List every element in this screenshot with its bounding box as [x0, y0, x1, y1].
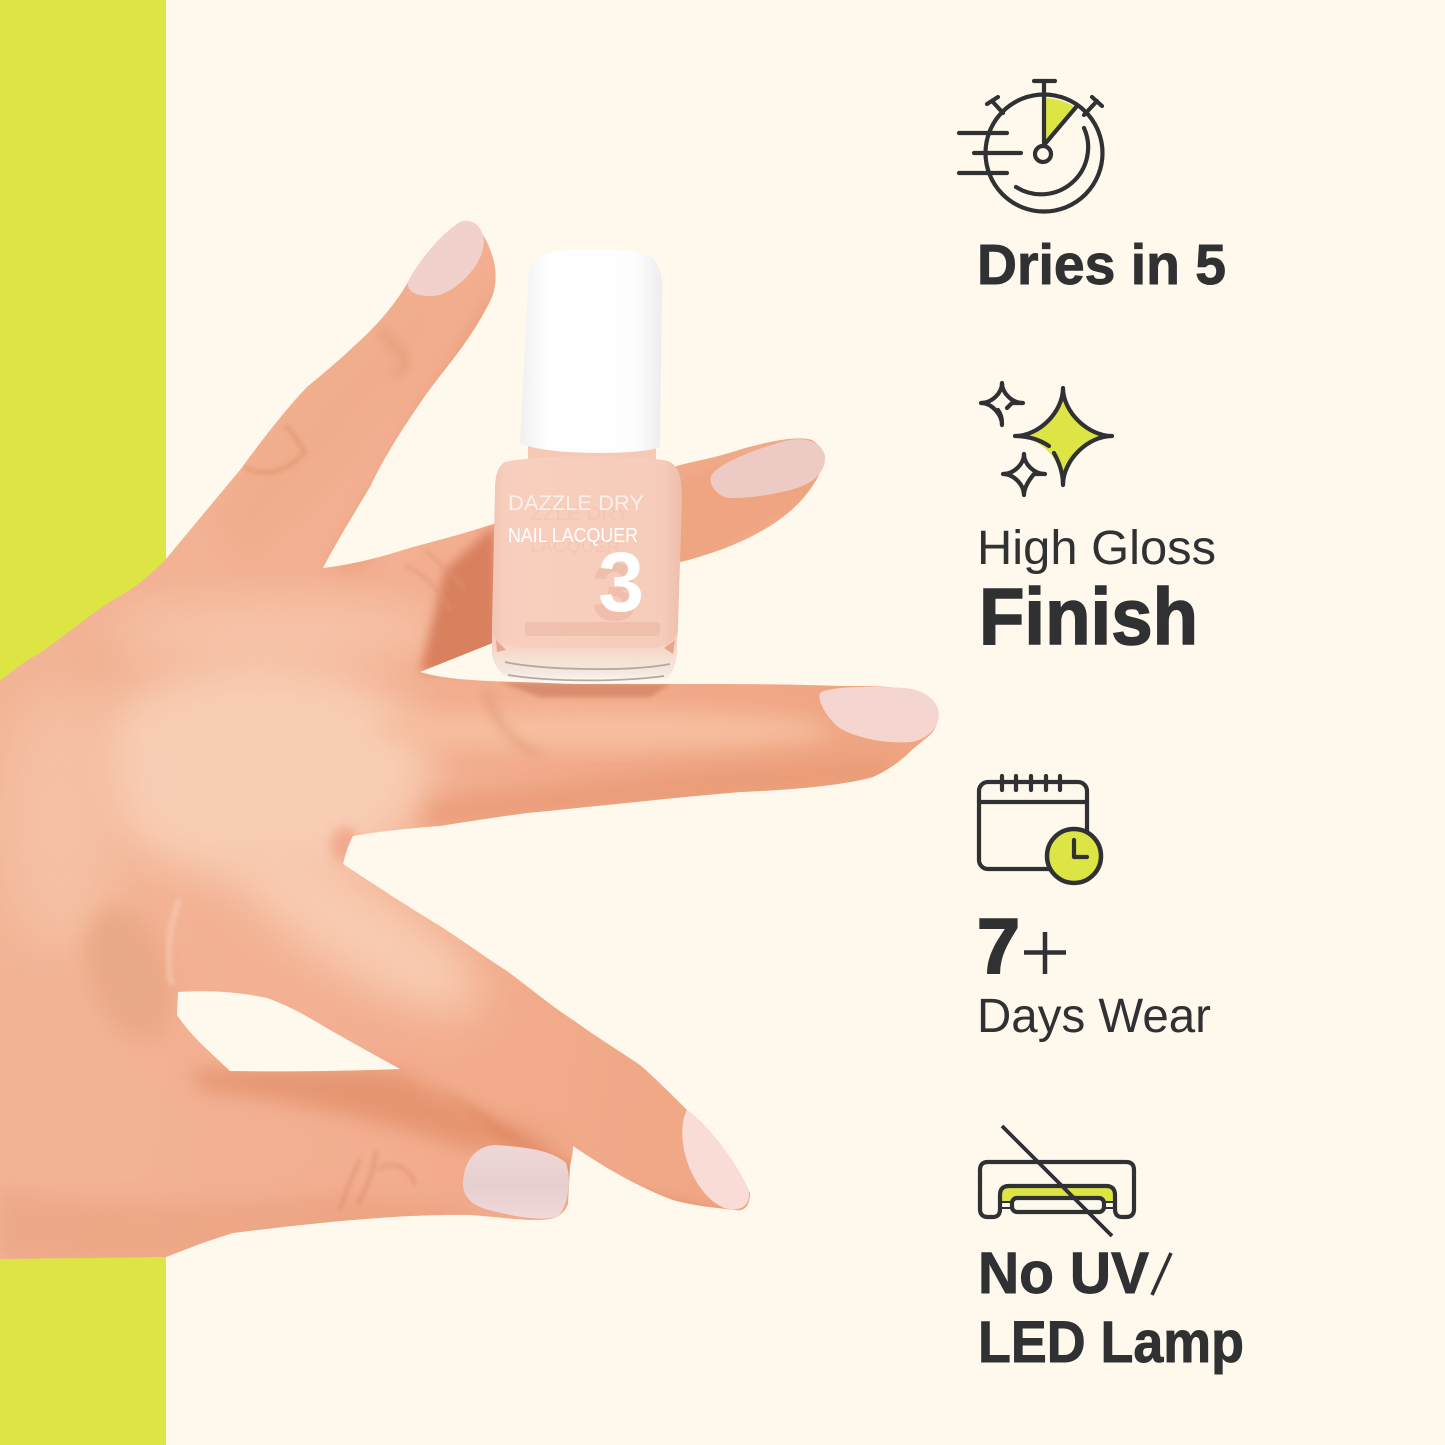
- nail: lower finger: [682, 1110, 749, 1210]
- nail polish bottle: [492, 249, 682, 684]
- product label: NAIL LACQUER: [508, 525, 638, 547]
- gap between fingers and thumb: [177, 991, 400, 1071]
- nail: thumb: [463, 1145, 569, 1219]
- nail polish bottle: LACQUER: [530, 539, 620, 556]
- nail polish bottle: 3: [592, 547, 638, 638]
- hand shading: [0, 275, 900, 1265]
- ghost label reflection: ZZLE DRY: [530, 504, 630, 524]
- nail: pointing finger: [819, 687, 939, 742]
- label: finish: Finish: [979, 572, 1198, 661]
- label: plus: [1024, 932, 1066, 974]
- label: no uv: No UV: [978, 1241, 1149, 1306]
- nail: middle finger: [711, 439, 825, 498]
- label: slash: [1152, 1253, 1171, 1295]
- hand photo illustration: [0, 221, 939, 1265]
- feature: no uv led lamp: [978, 1126, 1244, 1375]
- hand silhouette: [0, 221, 938, 1259]
- icon: sparkles: [981, 383, 1112, 495]
- bottle neck: [528, 440, 656, 466]
- icon: calendar with clock: [979, 776, 1101, 883]
- glass base: [492, 630, 677, 684]
- label: Dries in 5: [977, 233, 1226, 297]
- lime side band: [0, 0, 166, 1445]
- label: days wear: Days Wear: [977, 990, 1211, 1043]
- label: 7: 7: [977, 902, 1020, 990]
- icon: crossed lamp: [980, 1126, 1134, 1236]
- label: led lamp: LED Lamp: [978, 1310, 1244, 1375]
- bottle body: [492, 457, 682, 655]
- feature: high gloss finish: [977, 383, 1216, 661]
- icon: stopwatch: [959, 81, 1102, 212]
- feature: 7+ days wear: [977, 776, 1211, 1043]
- shade number: 3: [598, 535, 644, 629]
- label: high gloss: High Gloss: [977, 522, 1216, 575]
- bottle cap: [520, 249, 662, 453]
- feature: dries in 5: [959, 81, 1226, 297]
- nail: index finger: [408, 221, 484, 296]
- bottle reflections: [525, 622, 660, 636]
- brand label: DAZZLE DRY: [508, 492, 644, 515]
